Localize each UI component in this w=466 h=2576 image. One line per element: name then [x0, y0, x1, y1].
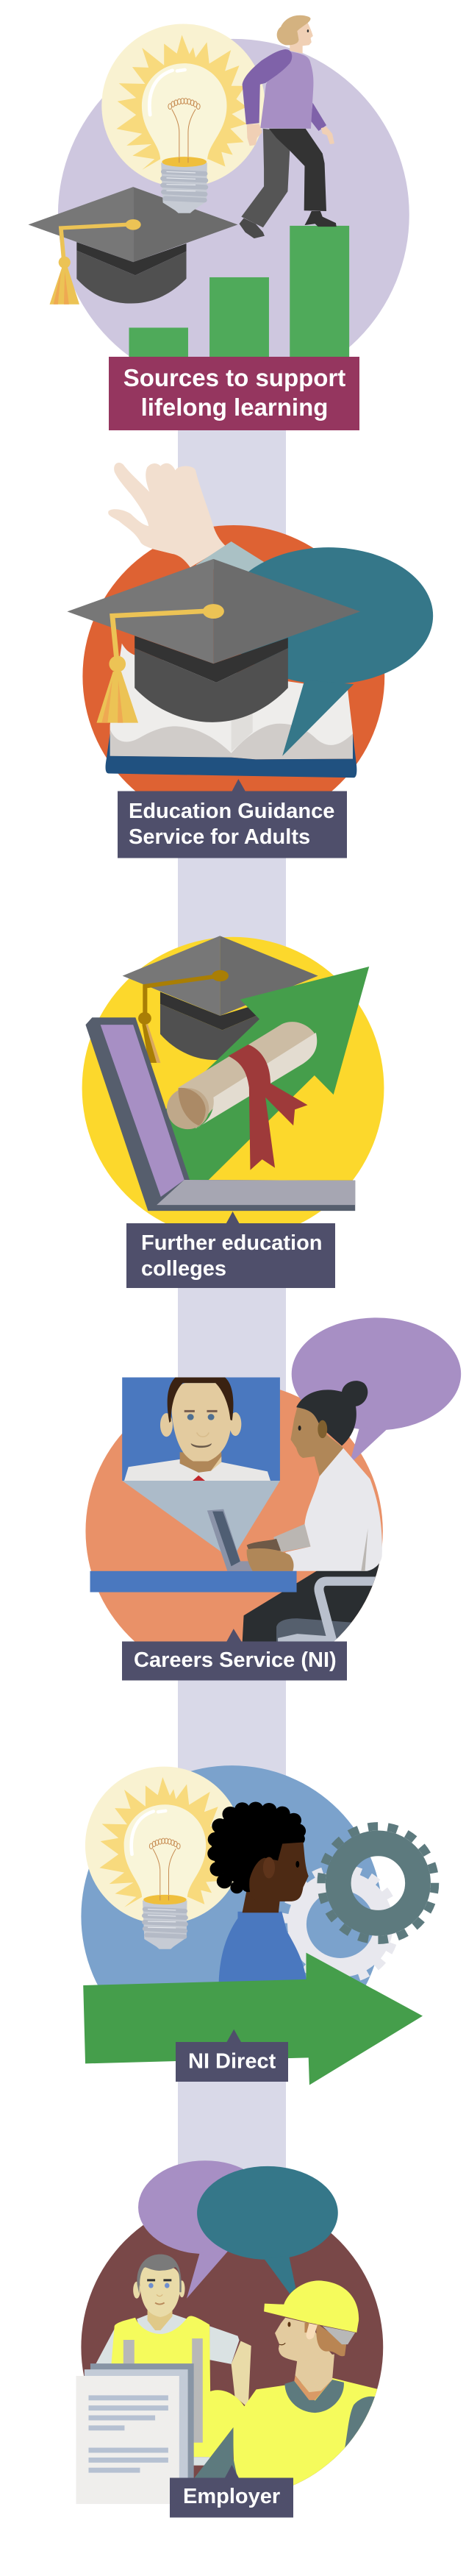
desk: [90, 1571, 297, 1593]
illustration: hand, cap, book and speech bubble: [67, 463, 433, 828]
label: education guidance service for adults: [118, 779, 347, 858]
illustration: steps, bulb, cap and woman: [28, 15, 409, 391]
icon: graduation cap: [123, 936, 318, 1063]
background circle: [81, 1765, 382, 2067]
icon: person in profile: [207, 1801, 309, 1983]
icon: laptop: [85, 1017, 355, 1211]
icon: pale back gear: [284, 1868, 396, 1980]
label: NI Direct: [176, 2029, 288, 2082]
background circle: [58, 39, 409, 391]
icon: document stack: [76, 2363, 194, 2504]
hand on laptop: [247, 1548, 294, 1571]
label: NI Direct: NI Direct: [188, 2049, 276, 2073]
icon: graduation cap: [28, 187, 237, 305]
speech bubble: [223, 547, 433, 756]
background circle: [82, 525, 384, 828]
panel: employer: [76, 2160, 385, 2517]
bar: tall step: [290, 226, 349, 358]
speech bubble: purple: [138, 2160, 272, 2299]
icon: laptop: [207, 1509, 253, 1571]
speech bubble: [292, 1317, 461, 1465]
label: further education colleges: colleges: [141, 1257, 226, 1281]
icon: dark front gear: [321, 1826, 435, 1940]
icon: graduation cap: [67, 559, 360, 723]
label: employer: Employer: [183, 2485, 280, 2508]
icon: walking woman: [240, 15, 337, 238]
icon: worker in hard hat, right: [194, 2280, 378, 2486]
projection beam: [122, 1481, 280, 1569]
label: education guidance service for adults: Service for Adults: [129, 825, 310, 849]
label: sources to support lifelong learning: Sources to support: [123, 364, 345, 391]
green arrow: [83, 1953, 423, 2085]
illustration: laptop, cap, arrow and scroll: [82, 936, 384, 1239]
icon: hand: [108, 463, 226, 567]
connecting vertical stripe: [178, 412, 286, 2168]
label: employer: [170, 2465, 293, 2517]
background circle: [85, 1382, 383, 1680]
icon: light bulb: [85, 1767, 243, 1949]
bar: small step: [129, 327, 188, 359]
shirt cuff: [196, 541, 265, 573]
label: careers service (NI): [122, 1629, 347, 1680]
icon: seated woman and chair: [243, 1381, 384, 1644]
bar: middle step: [209, 277, 269, 359]
speech bubble: teal: [197, 2166, 338, 2294]
icon: diploma scroll: [167, 1022, 317, 1170]
illustration: bulb, person, gears, arrow: [81, 1765, 435, 2085]
panel: sources to support lifelong learning: [28, 15, 409, 430]
green arrow: [165, 967, 369, 1181]
background circle: [82, 937, 384, 1239]
label: sources to support lifelong learning: [109, 357, 359, 430]
icon: open book: [106, 644, 356, 778]
panel: NI Direct: [81, 1765, 435, 2085]
label: sources to support lifelong learning: lifelong learning: [141, 394, 328, 421]
icon: light bulb: [101, 24, 265, 213]
background circle: [81, 2196, 383, 2498]
illustration: two workers talking: [76, 2160, 385, 2504]
label: further education colleges: Further education: [141, 1231, 323, 1255]
label: further education colleges: [126, 1211, 335, 1288]
panel: further education colleges: [82, 936, 384, 1288]
panel: careers service (NI): [85, 1317, 461, 1680]
label: careers service (NI): Careers Service (NI): [134, 1648, 337, 1672]
illustration: video call: [85, 1317, 462, 1642]
video screen with man: [122, 1378, 280, 1481]
label: education guidance service for adults: Education Guidance: [129, 800, 334, 823]
panel: education guidance service for adults: [67, 463, 433, 858]
icon: worker in vest, left: [96, 2255, 251, 2466]
